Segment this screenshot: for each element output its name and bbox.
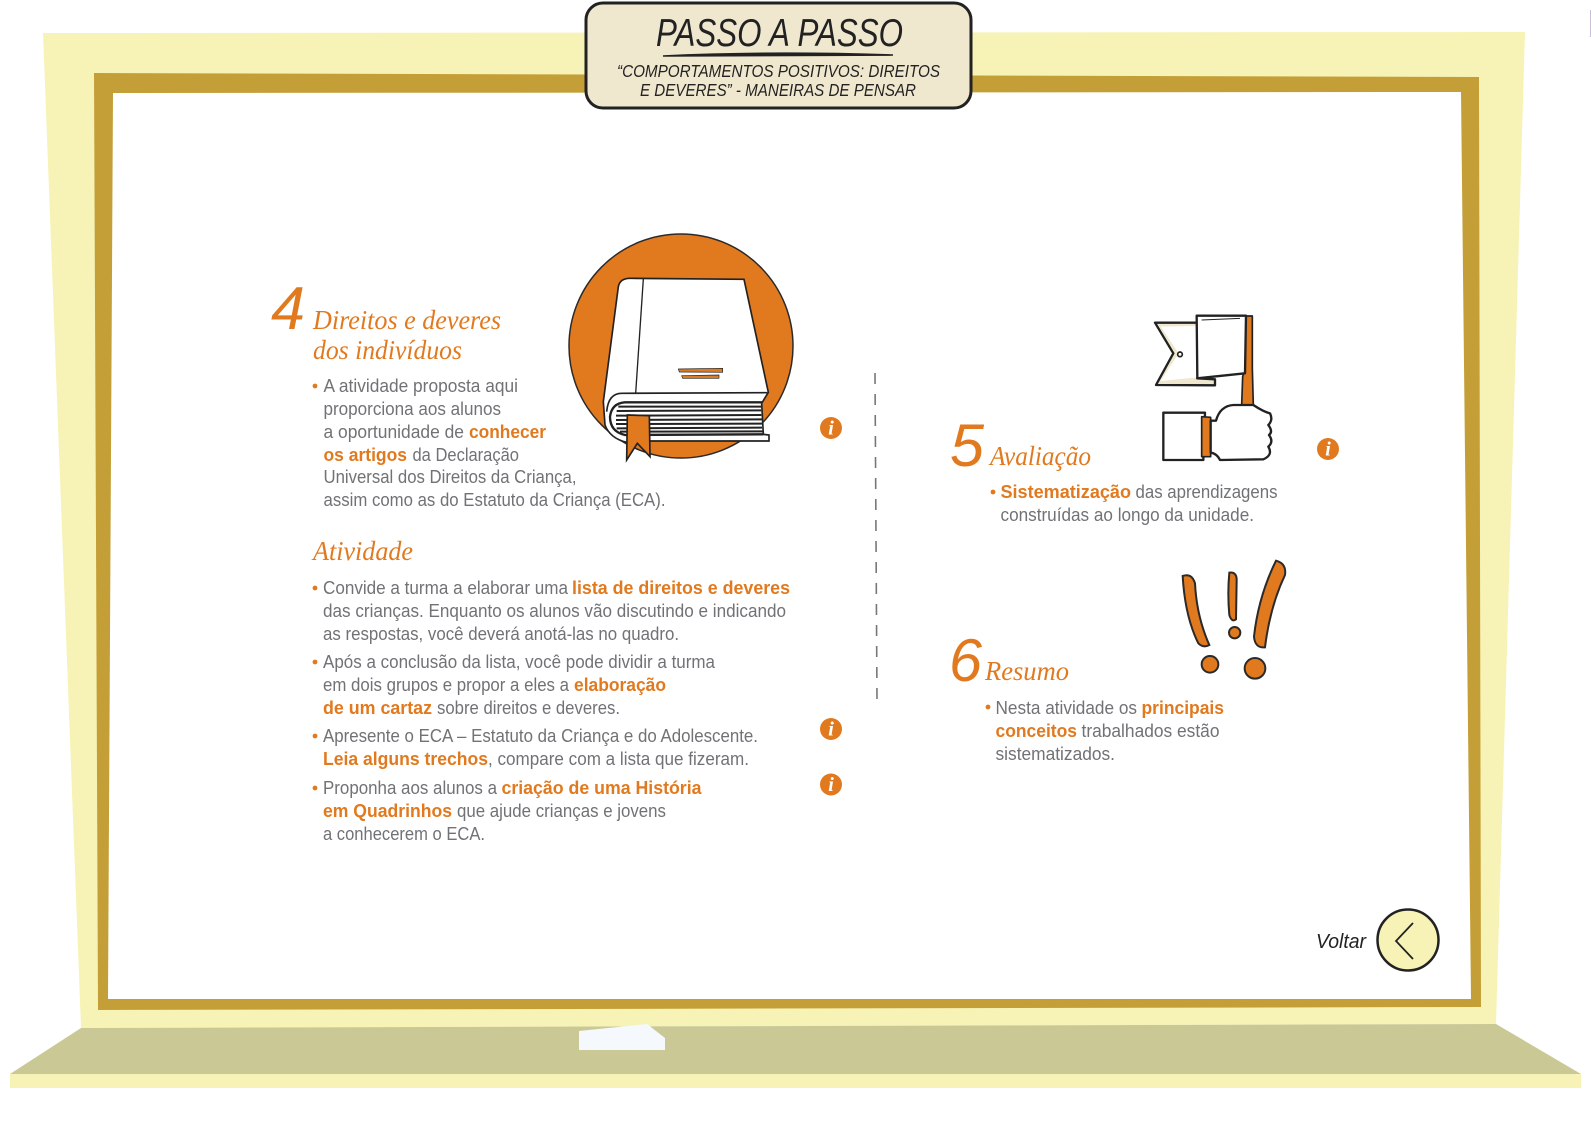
chalk tray [10, 1024, 1581, 1088]
icon: info 2 [820, 718, 842, 740]
icon: raised fist with flag [1155, 316, 1271, 460]
subtitle [617, 61, 940, 100]
section 5 text: construídas ao longo da unidade. [1000, 504, 1254, 525]
section 4 intro text: assim como as do Estatuto da Criança (ECA). [324, 489, 666, 510]
section 6 text: trabalhados estão [1082, 720, 1220, 741]
section 6 text: conceitos [996, 720, 1077, 741]
section 4 intro text: Universal dos Direitos da Criança, [324, 466, 576, 487]
section 6 heading [949, 627, 1069, 694]
title: PASSO A PASSO [656, 12, 903, 55]
heading text: Direitos e deveres [312, 305, 501, 335]
activity item 4: a conhecerem o ECA. [323, 823, 485, 844]
activity item 2 [313, 651, 716, 718]
section 4 intro text: a oportunidade de [324, 421, 464, 442]
activity item 4: criação de uma História [502, 777, 702, 798]
icon: info 4 [1317, 438, 1339, 460]
icon: info 2: i [828, 718, 834, 740]
activity item 4 [313, 777, 702, 844]
subtitle: “COMPORTAMENTOS POSITIVOS: DIREITOS [617, 61, 940, 81]
icon: info 3 [820, 774, 842, 796]
back button [1316, 910, 1438, 970]
icon: info 1 [820, 417, 842, 440]
section 5 text [991, 481, 1278, 525]
activity item 1: Convide a turma a elaborar uma [323, 577, 569, 598]
chalk piece [579, 1024, 665, 1050]
section 6 text: principais [1142, 697, 1224, 718]
label: Voltar: Voltar [1316, 931, 1367, 953]
section 5 text: das aprendizagens [1136, 481, 1278, 502]
activity item 3: Apresente o ECA – Estatuto da Criança e do Adolescente. [323, 725, 758, 746]
icon: info 3: i [828, 774, 834, 796]
number 5: 5 [950, 412, 985, 479]
activity list [313, 577, 790, 844]
section 6 text: sistematizados. [996, 743, 1115, 764]
subtitle: E DEVERES” - MANEIRAS DE PENSAR [640, 80, 916, 100]
section 4 intro text [313, 375, 666, 510]
icon: exclamation marks [1183, 561, 1285, 679]
activity item 4: Proponha aos alunos a [323, 777, 498, 798]
activity item 2: de um cartaz [323, 697, 432, 718]
icon: info 1: i [828, 418, 834, 440]
section 4 intro text: os artigos [324, 444, 407, 465]
number 6: 6 [949, 627, 983, 694]
section 5 text: Sistematização [1000, 481, 1131, 502]
title underline [663, 53, 893, 56]
activity item 2: sobre direitos e deveres. [437, 697, 620, 718]
section 5 heading [950, 412, 1091, 479]
activity item 1 [313, 577, 790, 644]
activity item 2: elaboração [574, 674, 666, 695]
icon: back arrow circle [1378, 910, 1438, 970]
icon: info 4: i [1325, 438, 1331, 460]
title plate [586, 3, 971, 108]
section 6 text [986, 697, 1224, 764]
section 4 intro text: A atividade proposta aqui [324, 375, 518, 396]
heading text: dos indivíduos [313, 335, 462, 365]
activity item 2: Após a conclusão da lista, você pode dividir a turma [323, 651, 716, 672]
icon: book in orange circle [569, 234, 793, 460]
heading text: Avaliação [988, 441, 1091, 471]
section 4 intro text: proporciona aos alunos [324, 398, 501, 419]
section 4 heading [271, 275, 501, 365]
activity heading: Atividade [311, 536, 413, 566]
section 4 intro text: da Declaração [412, 444, 519, 465]
activity item 1: as respostas, você deverá anotá-las no quadro. [323, 623, 679, 644]
activity item 2: em dois grupos e propor a eles a [323, 674, 570, 695]
activity item 3: Leia alguns trechos [323, 748, 488, 769]
activity item 4: que ajude crianças e jovens [457, 800, 666, 821]
section 6 text: Nesta atividade os [996, 697, 1137, 718]
heading text: Resumo [984, 656, 1069, 686]
activity item 4: em Quadrinhos [323, 800, 452, 821]
activity item 1: das crianças. Enquanto os alunos vão discutindo e indicando [323, 600, 786, 621]
activity item 1: lista de direitos e deveres [572, 577, 790, 598]
heading text [312, 305, 501, 365]
activity item 3: , compare com a lista que fizeram. [488, 748, 749, 769]
section 4 intro text: conhecer [469, 421, 546, 442]
activity item 3 [313, 725, 758, 769]
number 4: 4 [271, 275, 305, 342]
